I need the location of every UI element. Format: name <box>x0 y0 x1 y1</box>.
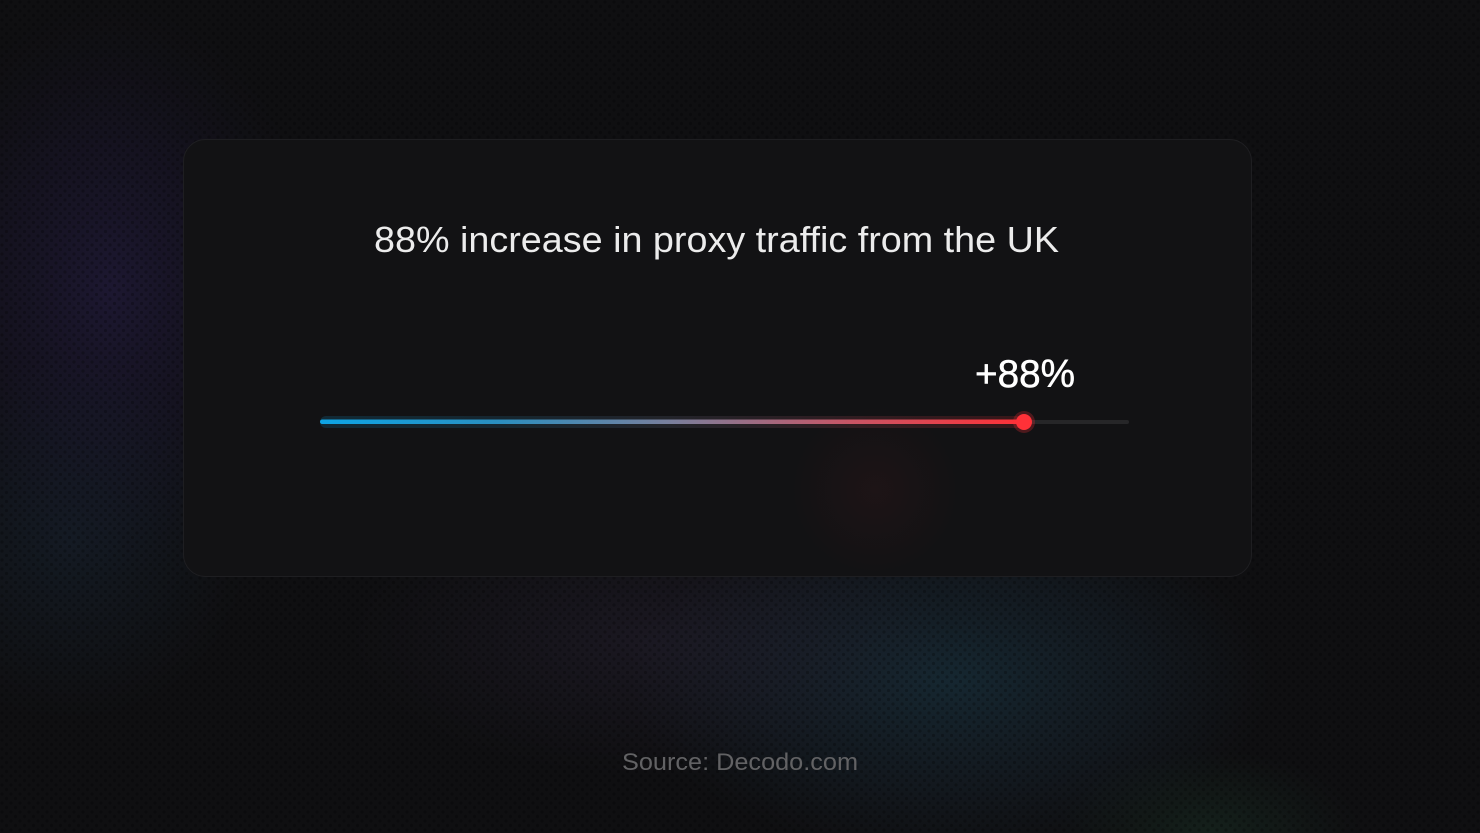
panel: stat card <box>184 140 1252 576</box>
value label: +88%: +88% <box>975 353 1075 396</box>
heading: 88% increase in proxy traffic from the UK <box>374 219 1059 260</box>
marker dot <box>1016 414 1032 430</box>
progress fill <box>320 420 1024 424</box>
progress track <box>320 420 1129 424</box>
source note: Source: Decodo.com <box>622 749 858 776</box>
marker glow <box>1013 411 1035 433</box>
progress bar <box>320 411 1129 433</box>
progress fill glow <box>320 416 1024 428</box>
